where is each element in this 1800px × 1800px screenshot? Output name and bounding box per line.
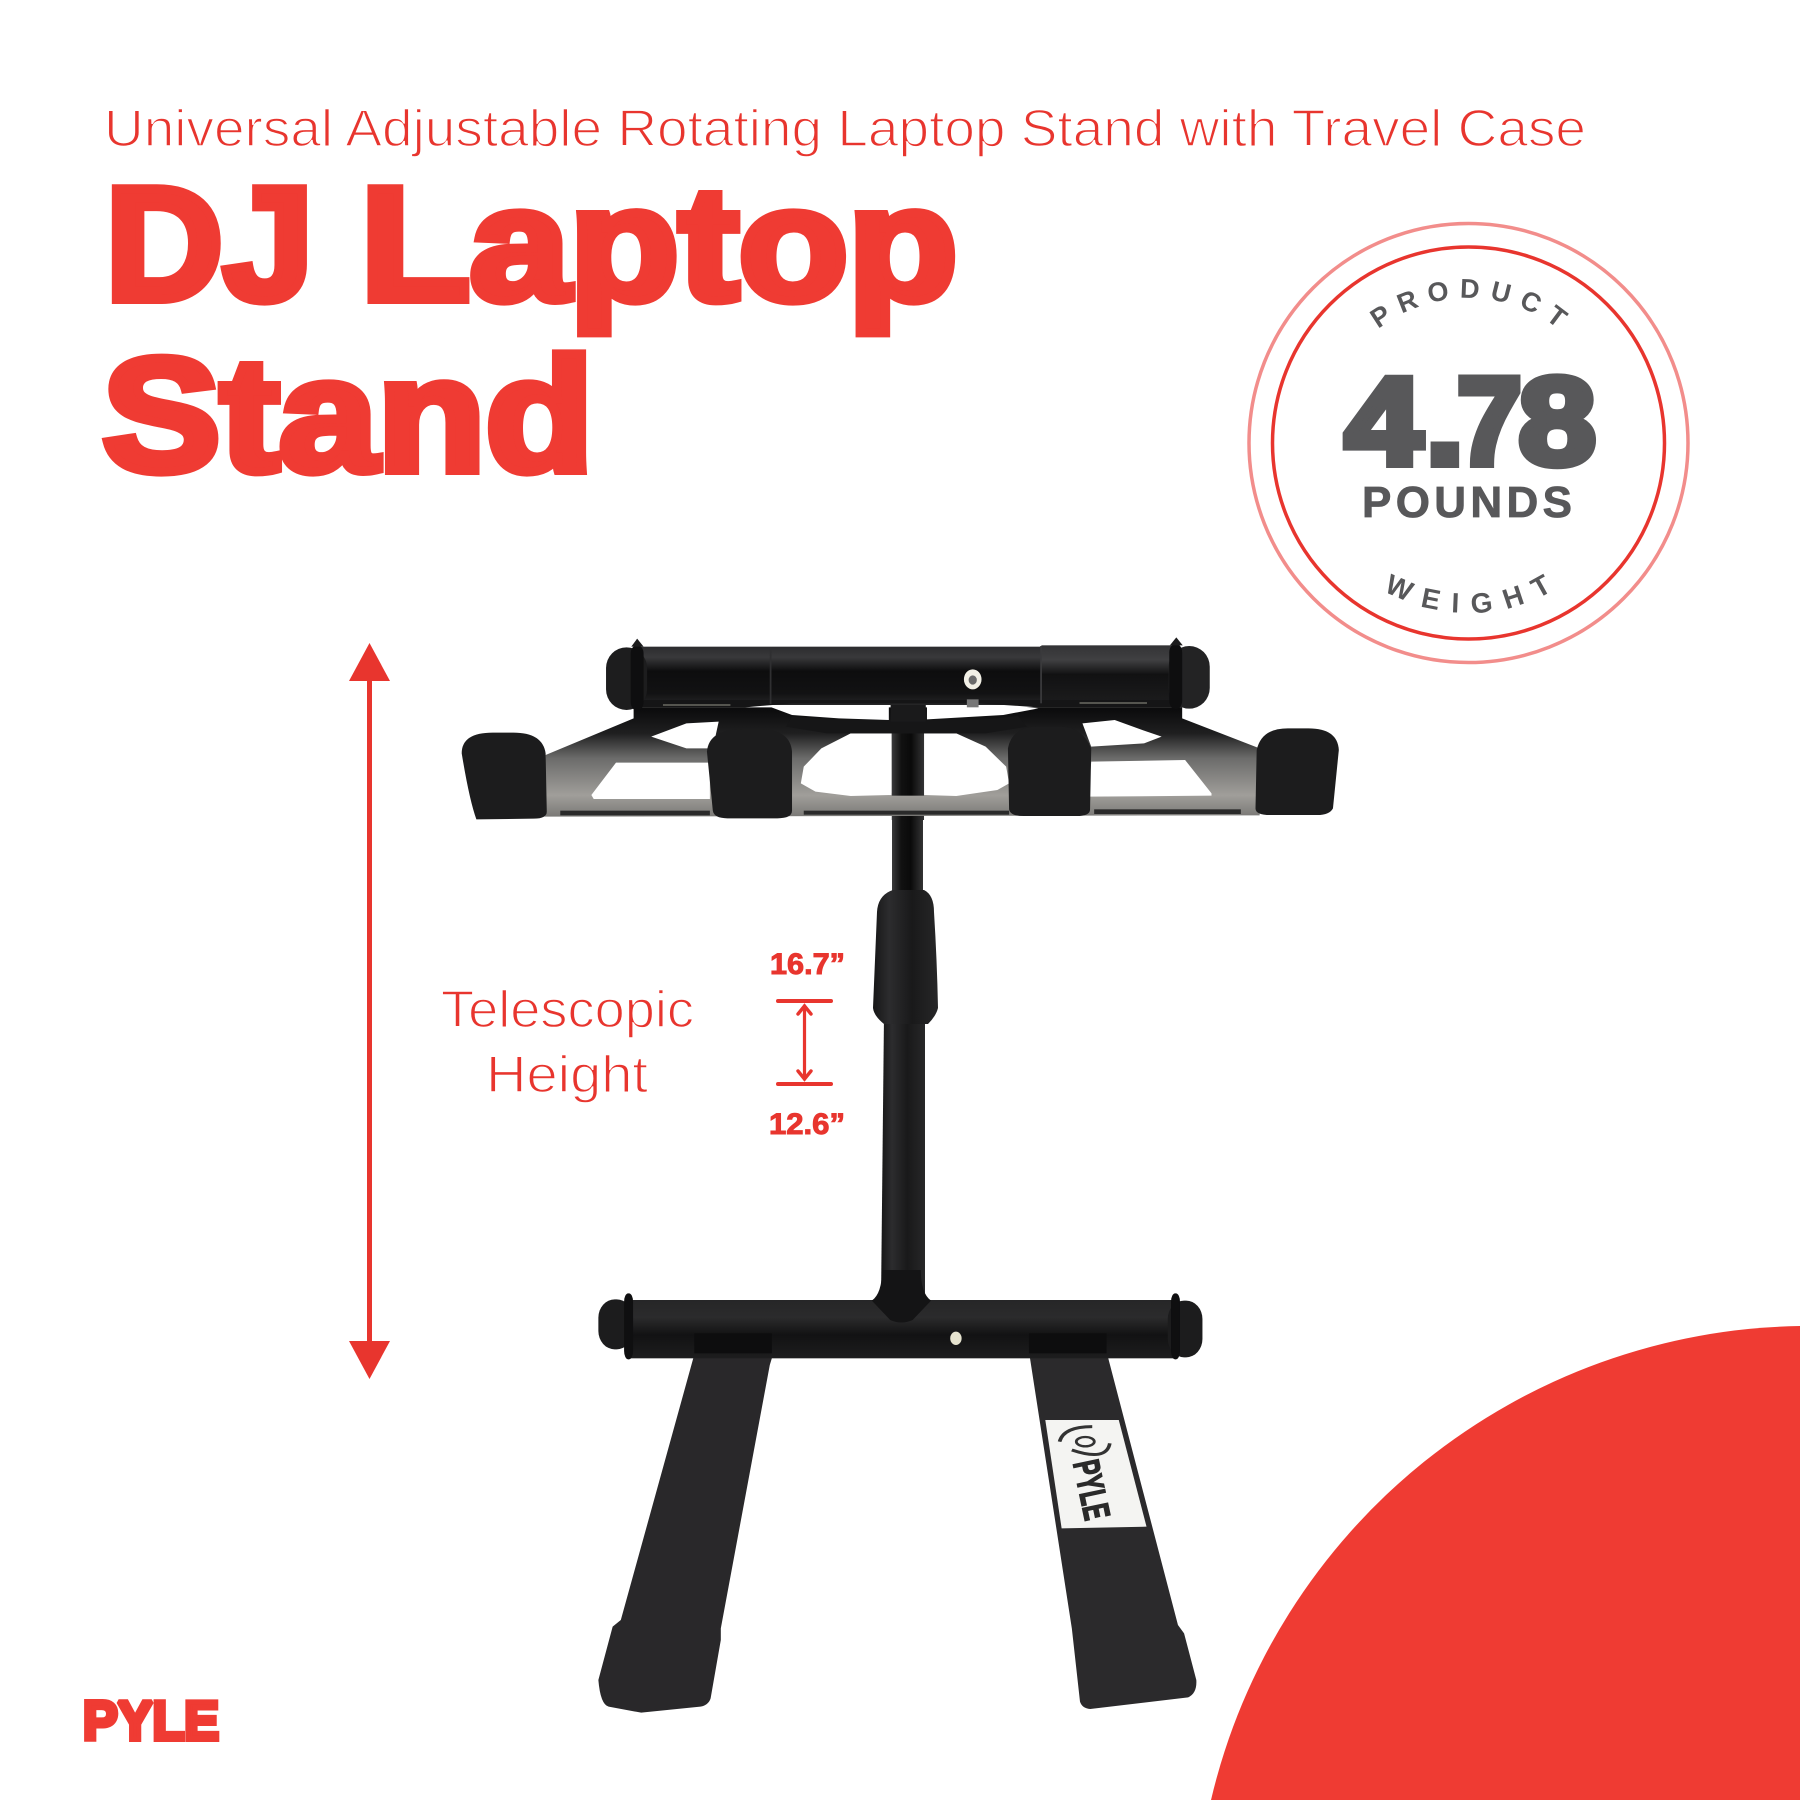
stand telescopic pole (873, 790, 938, 1300)
platform dark bridge (786, 716, 1027, 733)
leg label brand text: PYLE (1065, 1456, 1118, 1523)
leg label (1045, 1420, 1147, 1528)
subtitle: Universal Adjustable Rotating Laptop Stand with Travel Case (104, 100, 1586, 158)
stand base (598, 1270, 1202, 1713)
pole seen through platform (892, 733, 924, 796)
badge outer ring (1249, 224, 1688, 662)
pole junction (872, 1270, 931, 1322)
red circle corner (1211, 1326, 1800, 1800)
platform plate (544, 707, 1260, 817)
left leg (598, 1352, 774, 1713)
arrow: overall height (349, 643, 390, 1379)
label line 2: Height (486, 1046, 649, 1104)
title word: Laptop: Laptop (360, 154, 958, 334)
platform neck (891, 705, 926, 722)
title word: DJ: DJ (106, 154, 314, 334)
badge label: weight: WEIGHT (1388, 574, 1548, 613)
product photo: laptop stand (462, 637, 1339, 1713)
title (102, 154, 958, 506)
top tube (606, 637, 1210, 710)
base tube (598, 1270, 1202, 1359)
badge inner ring (1272, 247, 1664, 639)
platform pole lower segment (892, 793, 924, 820)
right leg (1029, 1352, 1196, 1709)
measure: 16.7 inch: 16.7” (770, 948, 845, 981)
base bolt (950, 1332, 962, 1345)
badge value (1345, 352, 1596, 491)
stand top platform (462, 637, 1339, 820)
logo: PYLE: PYLE (83, 1690, 219, 1752)
badge label: product: PRODUCT (1370, 279, 1569, 328)
measure arrow (778, 1001, 831, 1084)
label line 1: Telescopic (441, 981, 694, 1039)
tube bolt (964, 669, 982, 689)
measure: 12.6 inch: 12.6” (769, 1108, 845, 1141)
label: telescopic height (441, 981, 694, 1104)
badge value: 8 (1519, 352, 1596, 490)
badge value: 4. (1345, 352, 1464, 490)
foam pads (462, 727, 1339, 819)
badge: product weight (1247, 222, 1690, 664)
badge unit: POUNDS (1362, 478, 1572, 527)
platform front lip (560, 809, 1241, 815)
badge value: 7 (1457, 353, 1522, 491)
title word: Stand: Stand (102, 326, 594, 506)
